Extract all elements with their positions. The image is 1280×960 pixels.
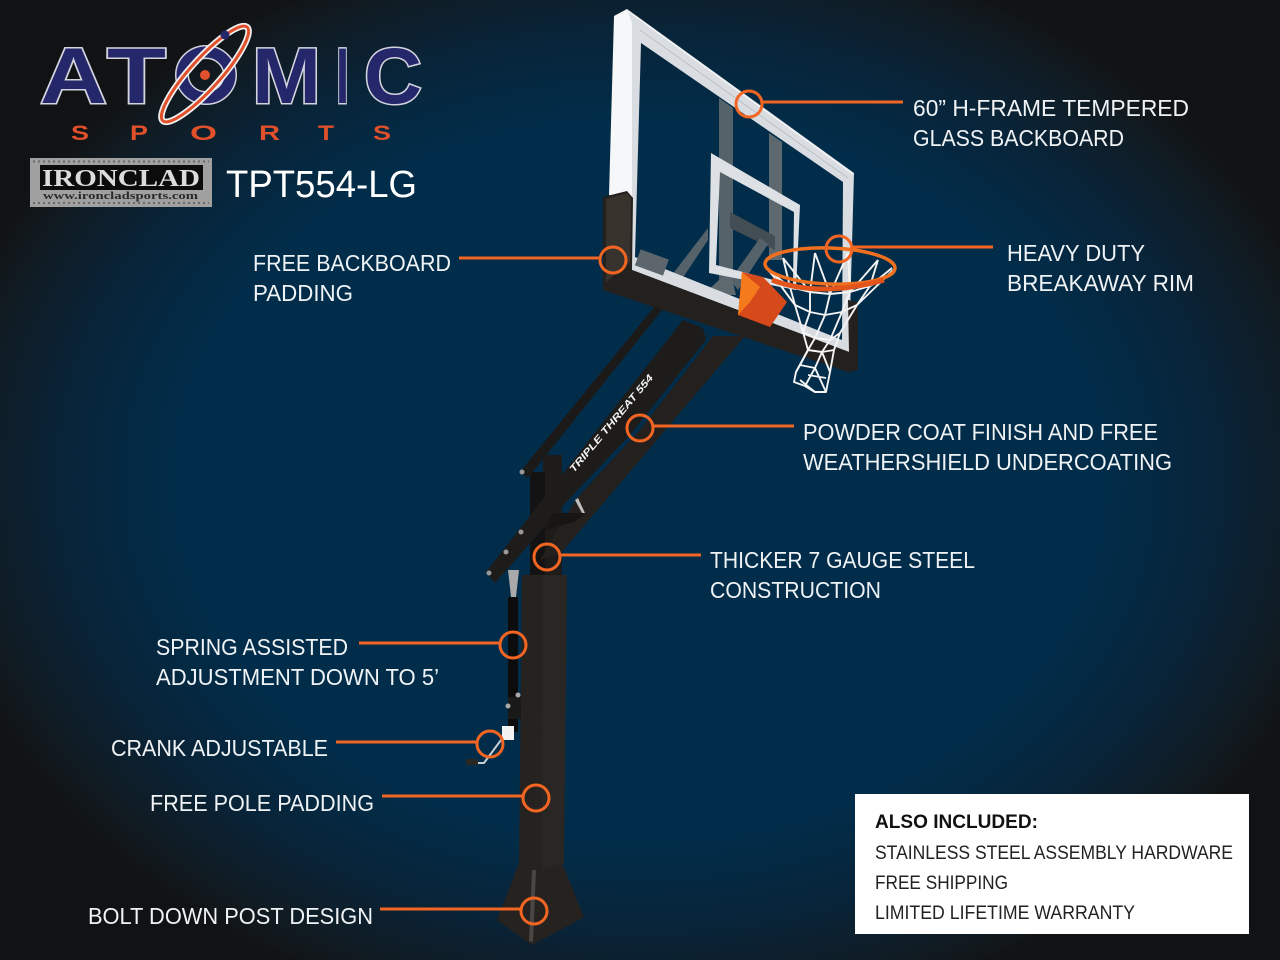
callout: spring: ADJUSTMENT DOWN TO 5’	[156, 664, 439, 690]
logo: Atomic Sports	[40, 17, 422, 145]
rim	[764, 246, 896, 289]
shooter square	[709, 153, 800, 290]
callout: rim: BREAKAWAY RIM	[1007, 270, 1194, 296]
hoop product	[466, 9, 896, 945]
panel: also included: LIMITED LIFETIME WARRANTY	[875, 902, 1135, 924]
rim bracket	[738, 272, 787, 327]
logo: Atomic Sports: P	[130, 122, 148, 145]
logo: Atomic Sports: O	[190, 122, 217, 145]
callout: powder coat: WEATHERSHIELD UNDERCOATING	[803, 449, 1172, 475]
panel: also included: STAINLESS STEEL ASSEMBLY HARDWARE	[875, 842, 1233, 864]
callout: steel: CONSTRUCTION	[710, 577, 881, 603]
model number: TPT554-LG	[226, 164, 417, 206]
callout: powder coat	[627, 415, 1172, 475]
badge: Ironclad: www.ironcladsports.com	[43, 191, 199, 202]
callout: pole padding: FREE POLE PADDING	[150, 790, 374, 816]
panel: also included: FREE SHIPPING	[875, 872, 1008, 894]
callout: backboard: 60” H-FRAME TEMPERED	[913, 95, 1189, 121]
callout: padding	[253, 247, 626, 306]
logo: Atomic Sports: C	[364, 31, 422, 120]
callout: backboard: GLASS BACKBOARD	[913, 125, 1124, 151]
callout: powder coat: POWDER COAT FINISH AND FREE	[803, 419, 1158, 445]
logo: Atomic Sports: T	[107, 31, 166, 120]
callout: steel	[534, 544, 975, 603]
spring	[506, 570, 521, 732]
callout: crank: CRANK ADJUSTABLE	[111, 735, 328, 761]
extension arms	[486, 306, 745, 583]
backboard padding	[603, 191, 858, 372]
callout: rim	[826, 236, 1194, 296]
badge: Ironclad: IRONCLAD	[42, 166, 200, 192]
logo: Atomic Sports: M	[252, 31, 321, 120]
panel: also included	[855, 794, 1249, 934]
backboard supports	[672, 98, 782, 295]
logo: Atomic Sports: S	[373, 122, 391, 145]
logo: Atomic Sports: R	[259, 122, 280, 145]
callout: backboard	[736, 91, 1189, 151]
callout: padding: PADDING	[253, 280, 353, 306]
badge: Ironclad	[30, 158, 212, 207]
logo: Atomic Sports: T	[318, 122, 334, 145]
callout: steel: THICKER 7 GAUGE STEEL	[710, 547, 975, 573]
post base	[497, 863, 584, 945]
pole	[519, 575, 567, 870]
callout: padding: FREE BACKBOARD	[253, 250, 451, 276]
arm lettering: TRIPLE THREAT 554	[568, 372, 656, 475]
logo: Atomic Sports: A	[40, 31, 107, 120]
callout: spring: SPRING ASSISTED	[156, 634, 348, 660]
panel: also included: ALSO INCLUDED:	[875, 811, 1038, 833]
callout: spring	[156, 632, 526, 690]
post upright	[530, 455, 562, 580]
callout: rim: HEAVY DUTY	[1007, 240, 1145, 266]
callout: bolt down: BOLT DOWN POST DESIGN	[88, 903, 373, 929]
callout: crank	[111, 731, 503, 761]
logo: Atomic Sports: S	[71, 122, 89, 145]
crank	[466, 726, 514, 765]
net	[768, 253, 893, 392]
backboard frame	[624, 9, 854, 352]
callout: bolt down	[88, 898, 547, 929]
callout: pole padding	[150, 785, 549, 816]
logo: Atomic Sports: I	[336, 31, 349, 120]
